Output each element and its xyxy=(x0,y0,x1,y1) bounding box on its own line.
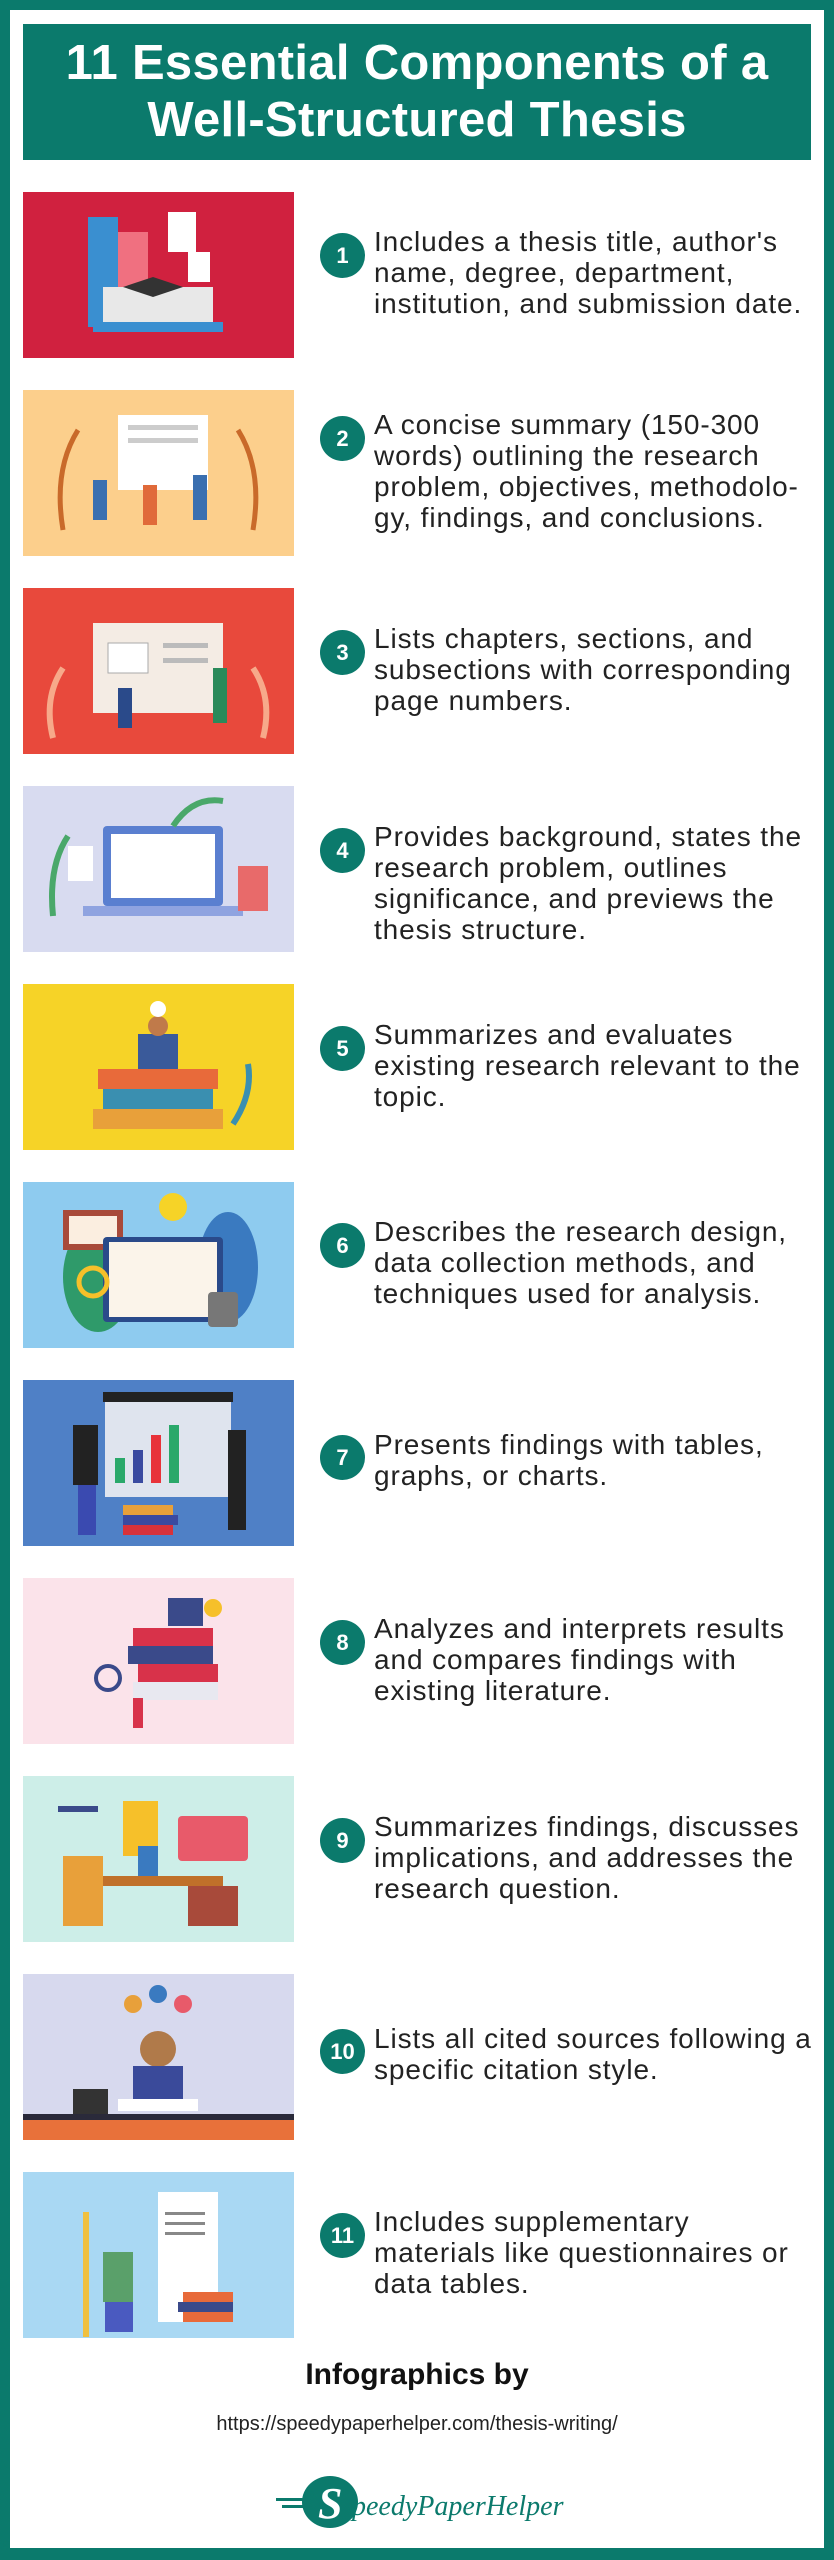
number 7: 7 xyxy=(336,1445,349,1470)
image 11: appendices xyxy=(23,2172,294,2338)
text 10: specific citation style. xyxy=(374,2054,659,2085)
logo: peedyPaperHelper xyxy=(350,2491,564,2522)
text 2: words) outlining the research xyxy=(374,440,760,471)
text 9: implications, and addresses the xyxy=(374,1842,794,1873)
number 11: 11 xyxy=(331,2223,354,2248)
text 4: significance, and previews the xyxy=(374,883,775,914)
text 10: Lists all cited sources following a xyxy=(374,2023,812,2054)
text 10 xyxy=(374,2023,812,2085)
number 8 xyxy=(320,1620,365,1665)
number 3 xyxy=(320,630,365,675)
number 5 xyxy=(320,1026,365,1071)
title: 11 Essential Components of a xyxy=(66,36,768,90)
text 2 xyxy=(374,409,799,533)
footer url: https://speedypaperhelper.com/thesis-writing/ xyxy=(216,2413,618,2435)
number 11 xyxy=(320,2213,365,2258)
text 9: research question. xyxy=(374,1873,621,1904)
text 8: existing literature. xyxy=(374,1675,611,1706)
title: Well-Structured Thesis xyxy=(147,93,687,147)
text 1: name, degree, department, xyxy=(374,257,734,288)
number 4 xyxy=(320,828,365,873)
number 8: 8 xyxy=(336,1630,349,1655)
number 4: 4 xyxy=(336,838,349,863)
image 8: discussion xyxy=(23,1578,294,1744)
image 5: literature review xyxy=(23,984,294,1150)
text 5 xyxy=(374,1019,801,1112)
text 11: materials like questionnaires or xyxy=(374,2237,789,2268)
image 2: abstract xyxy=(23,390,294,556)
text 11 xyxy=(374,2206,789,2299)
image 7: results chart xyxy=(23,1380,294,1546)
text 5: Summarizes and evaluates xyxy=(374,1019,733,1050)
text 4: Provides background, states the xyxy=(374,821,802,852)
number 2: 2 xyxy=(336,426,349,451)
text 6 xyxy=(374,1216,787,1309)
text 2: problem, objectives, methodolo- xyxy=(374,471,799,502)
image 10: references xyxy=(23,1974,294,2140)
text 6: data collection methods, and xyxy=(374,1247,756,1278)
number 1 xyxy=(320,233,365,278)
number 3: 3 xyxy=(336,640,349,665)
image 3: table of contents xyxy=(23,588,294,754)
text 3 xyxy=(374,623,792,716)
text 1 xyxy=(374,226,802,319)
text 11: data tables. xyxy=(374,2268,530,2299)
text 8 xyxy=(374,1613,785,1706)
logo xyxy=(276,2476,564,2528)
text 7: Presents findings with tables, xyxy=(374,1429,764,1460)
number 10 xyxy=(320,2029,365,2074)
number 10: 10 xyxy=(330,2039,355,2064)
logo: S xyxy=(318,2479,342,2528)
image 1: title page xyxy=(23,192,294,358)
image 6: methodology xyxy=(23,1182,294,1348)
text 7 xyxy=(374,1429,764,1491)
text 4: research problem, outlines xyxy=(374,852,727,883)
text 2: gy, findings, and conclusions. xyxy=(374,502,765,533)
text 2: A concise summary (150-300 xyxy=(374,409,760,440)
title xyxy=(23,24,811,160)
text 8: and compares findings with xyxy=(374,1644,737,1675)
number 9 xyxy=(320,1818,365,1863)
image 4: introduction xyxy=(23,786,294,952)
number 7 xyxy=(320,1435,365,1480)
text 5: existing research relevant to the xyxy=(374,1050,801,1081)
text 3: subsections with corresponding xyxy=(374,654,792,685)
number 5: 5 xyxy=(336,1036,349,1061)
number 2 xyxy=(320,416,365,461)
footer heading: Infographics by xyxy=(305,2358,529,2391)
text 4 xyxy=(374,821,802,945)
text 11: Includes supplementary xyxy=(374,2206,690,2237)
text 4: thesis structure. xyxy=(374,914,587,945)
image 9: conclusion xyxy=(23,1776,294,1942)
number 9: 9 xyxy=(336,1828,349,1853)
text 3: Lists chapters, sections, and xyxy=(374,623,753,654)
text 6: techniques used for analysis. xyxy=(374,1278,761,1309)
text 3: page numbers. xyxy=(374,685,572,716)
text 9 xyxy=(374,1811,799,1904)
text 7: graphs, or charts. xyxy=(374,1460,608,1491)
text 1: institution, and submission date. xyxy=(374,288,802,319)
number 1: 1 xyxy=(336,243,349,268)
text 1: Includes a thesis title, author's xyxy=(374,226,778,257)
text 6: Describes the research design, xyxy=(374,1216,787,1247)
number 6 xyxy=(320,1223,365,1268)
text 5: topic. xyxy=(374,1081,446,1112)
number 6: 6 xyxy=(336,1233,349,1258)
text 9: Summarizes findings, discusses xyxy=(374,1811,799,1842)
text 8: Analyzes and interprets results xyxy=(374,1613,785,1644)
